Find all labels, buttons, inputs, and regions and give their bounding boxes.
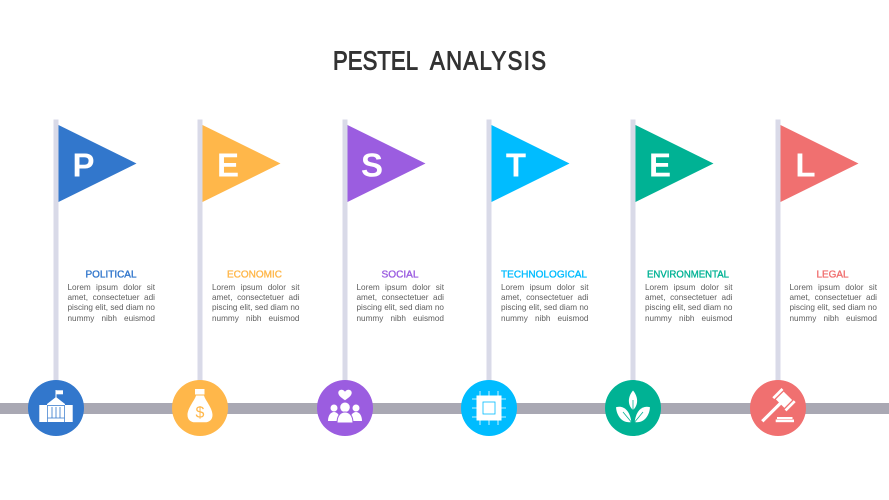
- panel: economic: ECONOMIC: [227, 268, 282, 280]
- panel: environmental: ENVIRONMENTAL: [647, 268, 729, 280]
- panel: technological: [461, 120, 588, 436]
- panel: legal: piscing elit, sed diam no: [790, 303, 877, 312]
- timeline bar: [0, 403, 889, 414]
- panel: legal: LEGAL: [816, 268, 848, 280]
- panel: technological: T: [506, 146, 526, 184]
- panel: social: nummy nibh euismod: [356, 314, 444, 323]
- title: [333, 47, 546, 76]
- panel: economic: E: [217, 146, 239, 184]
- panel: political: piscing elit, sed diam no: [68, 303, 155, 312]
- panel: economic: Lorem ipsum dolor sit: [212, 283, 300, 292]
- panel: political: Lorem ipsum dolor sit: [68, 283, 155, 292]
- panel: environmental: E: [649, 146, 671, 184]
- panel: economic: piscing elit, sed diam no: [212, 303, 300, 312]
- panel: economic: amet, consectetuer adi: [212, 293, 300, 302]
- panel: economic: $: [196, 404, 205, 422]
- panel: technological: Lorem ipsum dolor sit: [501, 283, 588, 292]
- panel: social: SOCIAL: [381, 268, 418, 280]
- panel: technological: nummy nibh euismod: [501, 314, 588, 323]
- panel: environmental: Lorem ipsum dolor sit: [645, 283, 732, 292]
- panel: environmental: piscing elit, sed diam no: [645, 303, 732, 312]
- panel: social: amet, consectetuer adi: [356, 293, 444, 302]
- panel: environmental: nummy nibh euismod: [645, 314, 732, 323]
- panel: social: S: [360, 146, 383, 184]
- panel: social: Lorem ipsum dolor sit: [356, 283, 444, 292]
- panel: legal: amet, consectetuer adi: [790, 293, 877, 302]
- panel: legal: nummy nibh euismod: [790, 314, 877, 323]
- panel: technological: amet, consectetuer adi: [501, 293, 588, 302]
- panel: economic: nummy nibh euismod: [212, 314, 300, 323]
- panel: legal: L: [795, 146, 815, 184]
- title: ANALYSIS: [430, 47, 546, 76]
- panel: technological: TECHNOLOGICAL: [501, 268, 587, 280]
- title: PESTEL: [333, 47, 418, 76]
- panel: legal: Lorem ipsum dolor sit: [790, 283, 877, 292]
- panel: technological: piscing elit, sed diam no: [501, 303, 588, 312]
- panel: legal: [750, 120, 877, 436]
- panel: social: piscing elit, sed diam no: [356, 303, 444, 312]
- panel: political: [28, 120, 155, 436]
- panel: political: nummy nibh euismod: [68, 314, 155, 323]
- panel: environmental: amet, consectetuer adi: [645, 293, 732, 302]
- panel: political: amet, consectetuer adi: [68, 293, 155, 302]
- panel: economic: [172, 120, 300, 436]
- panel: social: [317, 120, 444, 436]
- panel: political: POLITICAL: [85, 268, 136, 280]
- panel: environmental: [605, 120, 732, 436]
- panel: political: P: [72, 146, 94, 184]
